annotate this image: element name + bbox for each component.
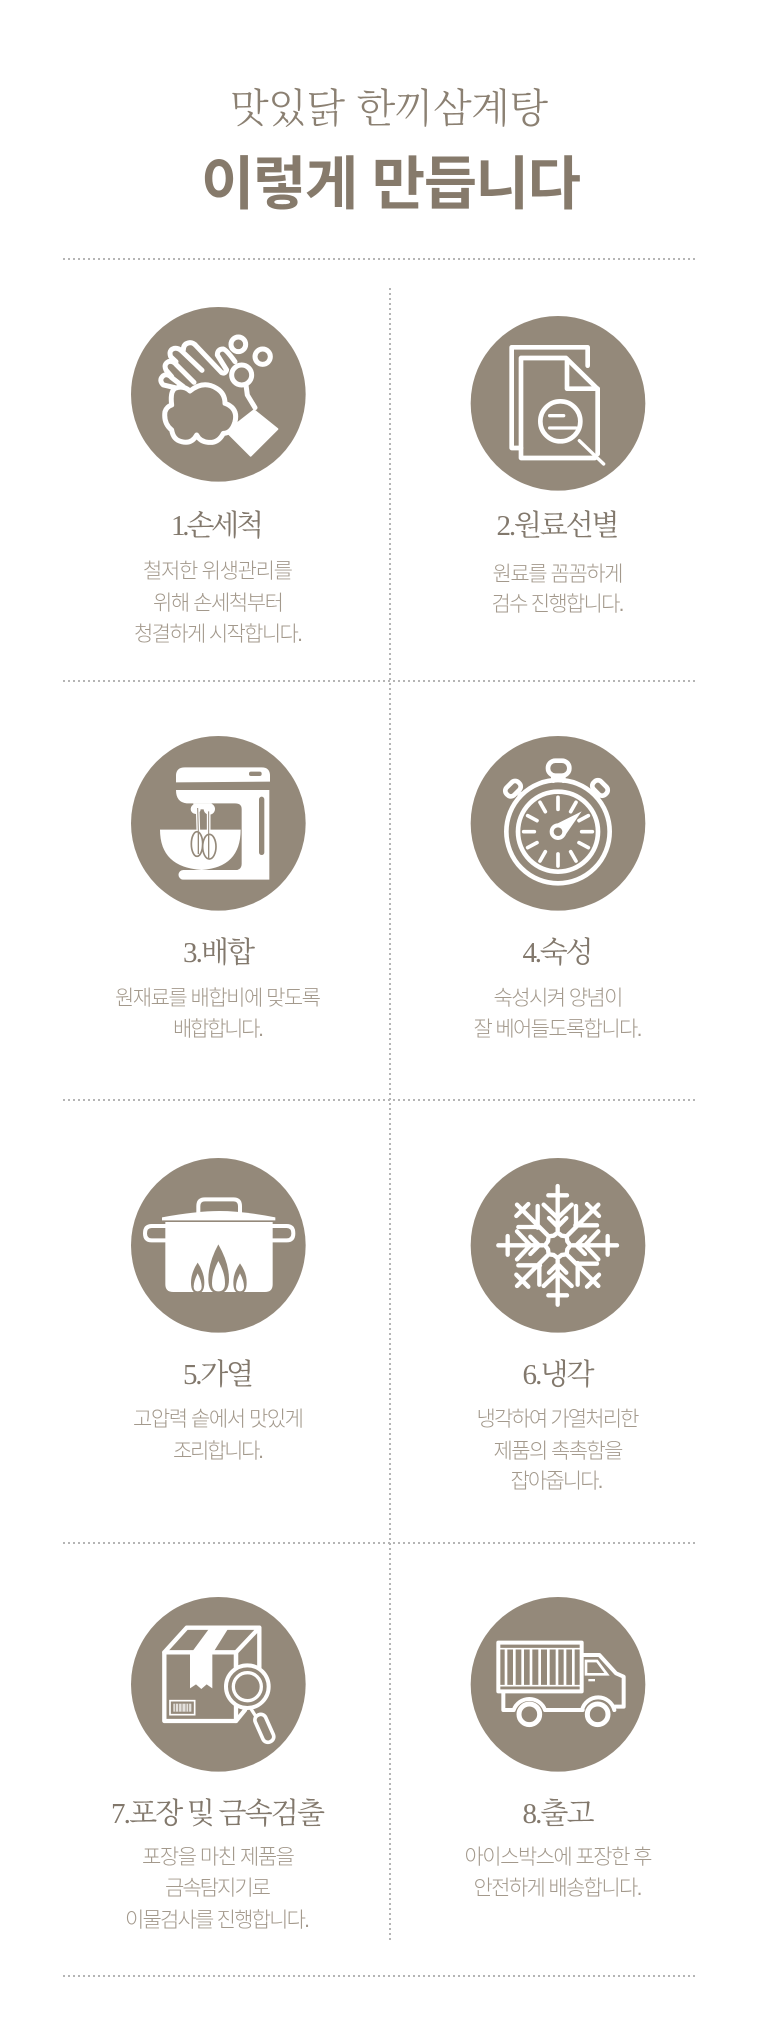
text: step 1 description: 청결하게 시작합니다.	[134, 623, 303, 646]
text: step 7 description	[125, 1846, 310, 1932]
panel: step 1 hand washing	[131, 307, 306, 646]
text: step 3 description: 원재료를 배합비에 맞도록	[115, 987, 321, 1010]
text: step 2 description: 검수 진행합니다.	[492, 593, 624, 616]
heading: step 5: 5.가열	[183, 1358, 254, 1391]
text: step 5 description: 고압력 솥에서 맛있게	[133, 1408, 304, 1431]
text: step 6 description: 잡아줍니다.	[510, 1470, 604, 1493]
panel: step 6 cooling	[471, 1158, 645, 1493]
text: step 7 description: 금속탐지기로	[165, 1877, 271, 1900]
icon: stopwatch	[471, 736, 645, 911]
text: step 2 description: 원료를 꼼꼼하게	[492, 563, 624, 586]
text: step 1 description: 철저한 위생관리를	[143, 560, 293, 583]
text: step 7 description: 이물검사를 진행합니다.	[125, 1909, 310, 1932]
text: step 4 description: 잘 베어들도록합니다.	[474, 1018, 642, 1041]
text: step 2 description	[492, 563, 624, 616]
text: step 4 description: 숙성시켜 양념이	[494, 987, 624, 1010]
panel: step 8 shipping	[464, 1597, 652, 1900]
panel: step 3 mixing	[115, 736, 321, 1041]
text: step 5 description	[133, 1408, 304, 1463]
heading: step 3: 3.배합	[183, 936, 255, 969]
title: 이렇게 만듭니다	[201, 137, 581, 221]
text: step 7 description: 포장을 마친 제품을	[142, 1846, 295, 1869]
text: step 6 description: 제품의 촉촉함을	[494, 1440, 624, 1463]
panel: step 5 heating	[131, 1158, 306, 1463]
heading: step 7: 7.포장 및 금속검출	[111, 1797, 325, 1830]
text: step 3 description	[115, 987, 321, 1041]
text: step 6 description	[476, 1408, 640, 1493]
title: 맛있닭 한끼삼계탕	[230, 77, 548, 134]
icon: stand mixer	[131, 736, 306, 911]
heading: step 2: 2.원료선별	[496, 509, 620, 542]
text: step 8 description: 아이스박스에 포장한 후	[464, 1846, 652, 1869]
icon: documents with magnifier	[471, 316, 645, 491]
heading: step 4: 4.숙성	[522, 936, 594, 969]
icon: snowflake	[471, 1158, 645, 1333]
icon: delivery truck	[471, 1597, 645, 1772]
heading: step 1: 1.손세척	[171, 509, 264, 542]
text: step 5 description: 조리합니다.	[173, 1440, 264, 1463]
icon: box with magnifier	[131, 1597, 306, 1772]
text: step 3 description: 배합합니다.	[173, 1018, 264, 1041]
title	[201, 77, 581, 221]
text: step 1 description	[134, 560, 303, 646]
text: step 6 description: 냉각하여 가열처리한	[476, 1408, 640, 1431]
icon: washing hands	[131, 307, 306, 482]
panel: step 4 aging	[471, 736, 645, 1041]
text: step 8 description	[464, 1846, 652, 1900]
heading: step 8: 8.출고	[522, 1797, 594, 1830]
text: step 8 description: 안전하게 배송합니다.	[474, 1877, 642, 1900]
panel: step 2 raw material selection	[471, 316, 645, 616]
text: step 1 description: 위해 손세척부터	[153, 592, 284, 615]
heading: step 6: 6.냉각	[522, 1358, 594, 1391]
text: step 4 description	[474, 987, 642, 1041]
icon: pot on flame	[131, 1158, 306, 1333]
panel: step 7 packaging and metal detection	[111, 1597, 325, 1932]
